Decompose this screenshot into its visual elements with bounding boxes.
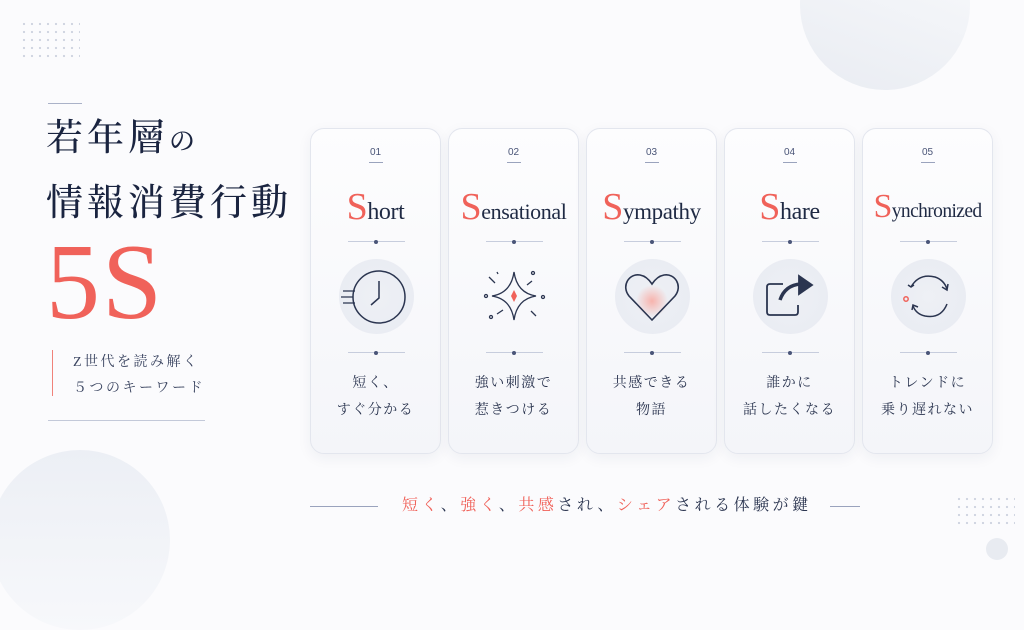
icon: clock [339, 259, 414, 334]
icon: sync [891, 259, 966, 334]
card 1: すぐ分かる [337, 403, 414, 418]
bottom line [48, 420, 205, 421]
card 2: Sensational [461, 186, 566, 228]
decoration: top-right circle [800, 0, 970, 90]
subtitle [52, 350, 205, 396]
subtitle: ５つのキーワード [73, 381, 205, 396]
decoration: small circle [986, 538, 1008, 560]
card 5 [862, 128, 993, 454]
title: 情報消費行動 [46, 183, 292, 224]
card 5: Synchronized [873, 188, 982, 225]
card 2: 02 [508, 147, 519, 158]
title: 若年層の [46, 118, 199, 159]
tagline: 短く、強く、共感され、シェアされる体験が鍵 [402, 497, 812, 514]
icon: share [753, 259, 828, 334]
card 2: 強い刺激で [475, 376, 552, 391]
card 1: 01 [370, 147, 381, 158]
card 2: 惹きつける [475, 403, 552, 418]
card 3: 共感できる [613, 376, 690, 391]
decoration: dot grid [20, 20, 80, 60]
card 3: Sympathy [602, 186, 701, 228]
card 3 [586, 128, 717, 454]
icon: sparkle [484, 270, 546, 320]
card 5: 乗り遅れない [881, 403, 974, 418]
heading: 5S: 5S [46, 223, 164, 342]
decoration: bottom-left circle [0, 450, 170, 630]
icon: heart [615, 259, 690, 334]
card 5: トレンドに [889, 376, 966, 391]
subtitle: Z世代を読み解く [73, 355, 200, 370]
card 3: 物語 [636, 403, 667, 418]
card 4: 誰かに [766, 376, 813, 391]
card 1 [310, 128, 441, 454]
card 4: 話したくなる [743, 403, 836, 418]
card 4: 04 [784, 147, 795, 158]
card 1: Short [347, 186, 404, 228]
card 4 [724, 128, 855, 454]
card 5: 05 [922, 147, 933, 158]
top line [48, 103, 82, 104]
card 1: 短く、 [352, 376, 399, 391]
title [46, 118, 292, 224]
card 2 [448, 128, 579, 454]
card 3: 03 [646, 147, 657, 158]
card 4: Share [759, 186, 820, 228]
